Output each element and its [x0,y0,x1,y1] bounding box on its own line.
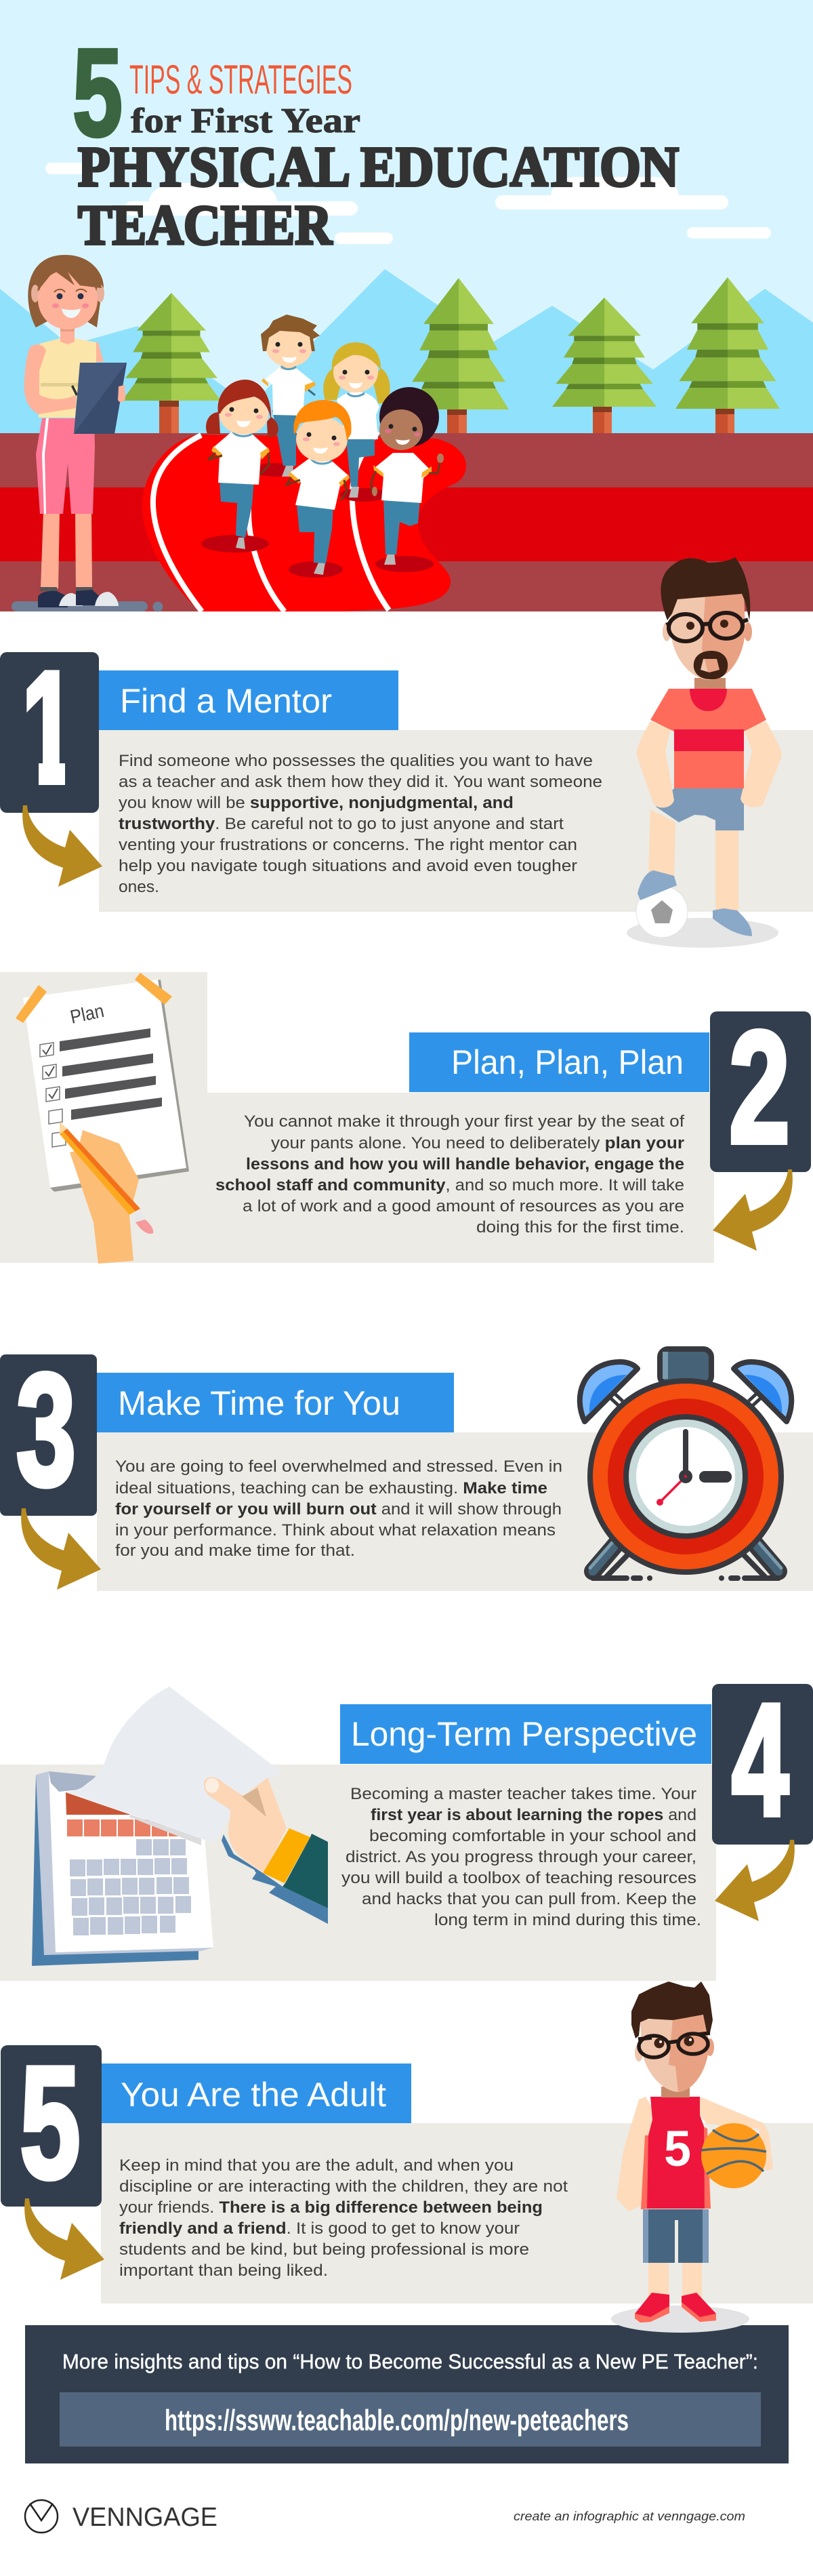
body text: for yourself or you will burn out and it will show through [115,1500,562,1518]
venngage logo: VENNGAGE [72,2503,217,2532]
heading bar [98,670,398,730]
arrow [713,1169,793,1251]
body text: ones. [119,878,159,896]
body text: You are going to feel overwhelmed and stressed. Even in [115,1457,562,1476]
child: orange hair [287,400,352,578]
arrow [24,2198,104,2280]
main title line 2: TEACHER [78,194,333,257]
panel background [0,972,714,1263]
arrow [715,1840,795,1921]
subtitle: for first year: for First Year [131,102,360,140]
illustration: boy with basketball [611,1981,773,2333]
body text: doing this for the first time. [476,1218,684,1236]
body text: students and be kind, but being professional is more [119,2240,529,2259]
link box [60,2392,761,2447]
child: blonde hair [323,342,390,502]
section 3: make time for you [0,1340,813,1591]
body text: first year is about learning the ropes and [371,1806,696,1824]
heading bar [97,1373,454,1432]
body text: trustworthy . Be careful not to go to just anyone and start [119,815,564,833]
call to action panel [25,2325,789,2463]
track lines [153,432,389,611]
number badge: 5 [20,2033,80,2211]
subtitle: tips and strategies: TIPS & STRATEGIES [129,57,352,102]
body text: your pants alone. You need to deliberately plan your [271,1134,684,1152]
body text: help you navigate tough situations and avoid even tougher [119,857,577,875]
arrow [22,805,102,887]
title block [72,22,679,257]
panel background [99,730,813,912]
body text: and hacks that you can pull from. Keep the [362,1890,696,1908]
arrow [21,1508,101,1590]
panel background [97,1432,813,1591]
footer note: create an infographic at venngage.com [514,2510,745,2523]
panel background [0,1765,716,1981]
body text: lessons and how you will handle behavior, engage the [246,1155,684,1173]
clouds [45,163,771,244]
heading bar: Make Time for You [118,1384,400,1422]
venngage logo [25,2500,217,2533]
illustration: boy with basketball: 5 [664,2120,691,2177]
body text: long term in mind during this time. [434,1911,701,1929]
body text: Keep in mind that you are the adult, and when you [119,2156,514,2175]
illustration: plan checklist and hand: Plan [68,1000,106,1028]
body text: you will build a toolbox of teaching resources [341,1869,696,1887]
body text: important than being liked. [119,2261,328,2280]
promo text: More insights and tips on “How to Become Successful as a New PE Teacher”: [62,2350,758,2373]
body text: a lot of work and a good amount of resources as you are [243,1197,684,1215]
heading bar: Plan, Plan, Plan [451,1043,684,1081]
body text: in your performance. Think about what relaxation means [115,1521,556,1539]
body text: for you and make time for that. [115,1542,355,1560]
body text [115,1457,562,1560]
section 5: you are the adult [1,2033,813,2303]
ground [0,433,813,611]
link text: https://ssww.teachable.com/p/new-peteachers [165,2404,629,2437]
heading bar: You Are the Adult [121,2076,386,2114]
body text: school staff and community , and so much more. It will take [215,1176,684,1194]
section 4: long-term perspective [0,1670,813,1981]
body text [215,1112,684,1236]
body text: venting your frustrations or concerns. The right mentor can [119,836,577,854]
mountains [0,269,813,434]
body text [119,2156,568,2280]
heading bar: Find a Mentor [120,682,332,720]
illustration: calendar and hand [32,1687,328,1966]
body text [119,752,602,896]
running track [142,435,466,611]
child: dark hair [371,387,444,572]
body text [341,1785,701,1929]
body text: district. As you progress through your career, [346,1848,696,1866]
pine trees [122,277,780,433]
panel background [101,2123,813,2303]
body text: as a teacher and ask them how they did it. You want someone [119,773,602,791]
section 1: find a mentor [0,557,813,948]
section 2: plan, plan, plan [0,972,811,1264]
illustration: plan checklist and hand [16,973,189,1264]
heading bar [100,2064,411,2123]
body text: you know will be supportive, nonjudgmental, and [119,794,514,812]
body text: Find someone who possesses the qualities you want to have [119,752,593,770]
child: brown hair [254,315,320,477]
heading bar [409,1032,709,1092]
heading bar: Long-Term Perspective [351,1715,697,1753]
body text: discipline or are interacting with the children, they are not [119,2177,568,2196]
body text: your friends. There is a big difference between being [119,2198,543,2217]
child: red hair [201,380,278,552]
teacher [12,255,163,611]
body text: becoming comfortable in your school and [369,1827,696,1845]
hero illustration panel [0,0,813,611]
children running [201,315,444,578]
number badge: 3 [16,1340,76,1518]
heading bar [340,1704,711,1764]
body text: ideal situations, teaching can be exhausting. Make time [115,1479,547,1497]
body text: friendly and a friend . It is good to get to know your [119,2219,520,2238]
body text: Becoming a master teacher takes time. Your [350,1785,696,1803]
illustration: man with soccer ball [627,557,782,948]
main title line 1: PHYSICAL EDUCATION [78,136,679,199]
number badge: 1 [22,638,76,816]
illustration: alarm clock [580,1349,791,1581]
body text: You cannot make it through your first year by the seat of [244,1112,684,1131]
big numeral five: 5 [72,22,123,162]
